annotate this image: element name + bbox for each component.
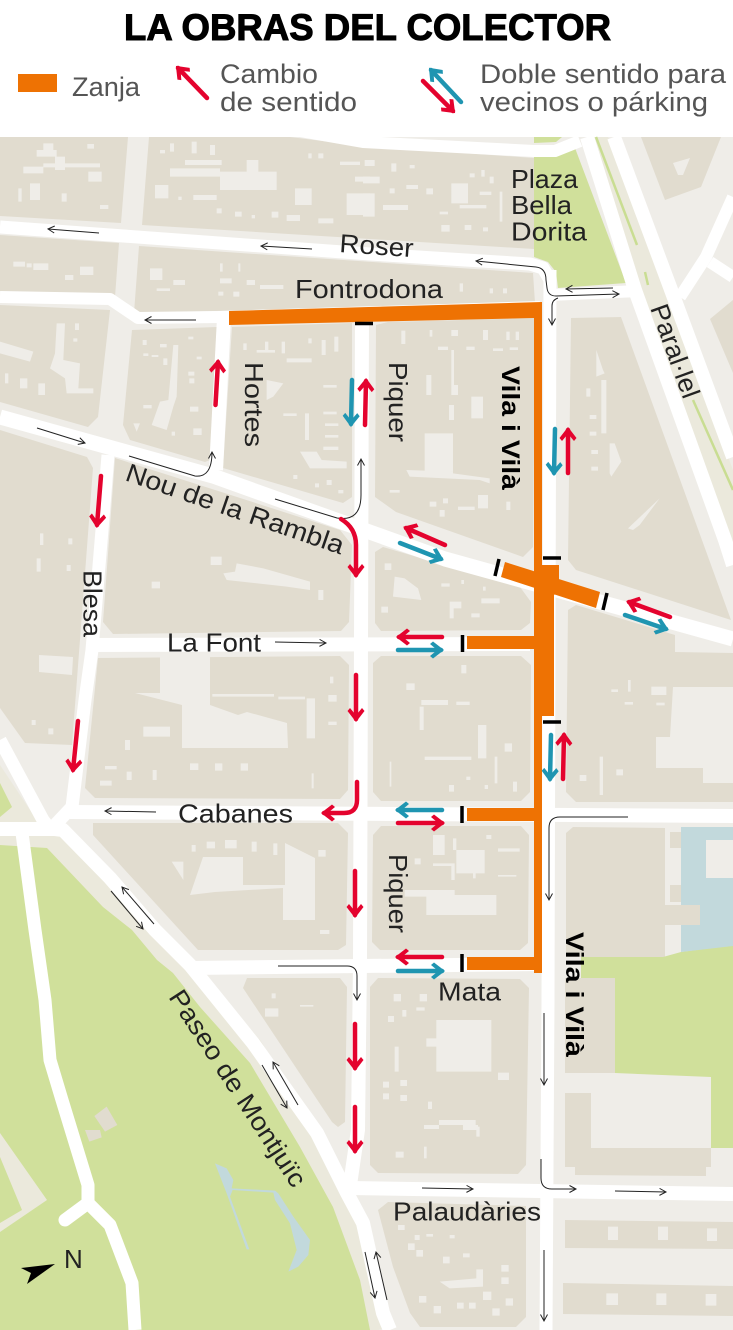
label: Plaza Bella Dorita: Bella <box>511 190 573 220</box>
two-way arrow pairs <box>351 380 670 971</box>
black closure bars <box>355 324 607 972</box>
pair: Piquer north <box>351 380 366 425</box>
legend: doble sentido: Doble sentido para <box>480 59 727 89</box>
legend: zanja <box>18 72 141 102</box>
legend: cambio de sentido <box>178 59 357 117</box>
street labels: Paral·lel <box>644 300 706 402</box>
street labels: La Font <box>167 628 262 658</box>
title: LA OBRAS DEL COLECTOR <box>124 7 611 48</box>
pair: Vila i Vilà north <box>554 429 568 473</box>
orange trench <box>229 302 600 973</box>
legend: cambio de sentido: Cambio <box>220 59 318 89</box>
street labels: Mata <box>438 976 502 1006</box>
pair: Cabanes <box>398 810 442 823</box>
street labels: Piquer <box>383 362 413 442</box>
street labels: Hortes <box>239 362 269 447</box>
pair: Nou de la Rambla west <box>400 528 445 559</box>
red direction-change arrows <box>73 362 357 1151</box>
street labels: Roser <box>339 228 415 263</box>
legend <box>18 59 727 117</box>
street labels: Palaudàries <box>393 1196 541 1226</box>
legend: doble sentido <box>423 59 727 117</box>
street labels: Nou de la Rambla <box>122 457 349 560</box>
legend: doble sentido: vecinos o párking <box>480 87 708 117</box>
median green stripe <box>596 137 733 490</box>
park building <box>85 1107 117 1142</box>
street labels: Fontrodona <box>295 274 444 304</box>
label: Plaza Bella Dorita: Dorita <box>511 216 588 246</box>
street labels <box>78 164 706 1226</box>
legend: zanja: Zanja <box>72 72 141 102</box>
thin traffic arrows <box>37 229 666 1321</box>
north arrow <box>21 1244 83 1284</box>
legend: cambio de sentido: de sentido <box>220 87 357 117</box>
water <box>215 827 733 1272</box>
pair: Vila i Vilà south <box>550 735 564 779</box>
street labels: Vila i Vilà <box>496 366 524 490</box>
label: Plaza Bella Dorita: Plaza <box>511 164 579 194</box>
pair: La Font <box>398 637 442 650</box>
label: Plaza Bella Dorita <box>511 164 588 246</box>
street labels: Blesa <box>78 570 108 638</box>
pair: Mata <box>398 957 442 971</box>
street labels: Vila i Vilà <box>560 932 588 1057</box>
north arrow: N <box>64 1244 83 1274</box>
street labels: Cabanes <box>178 798 293 828</box>
street labels: Piquer <box>383 854 413 933</box>
street labels: Paseo de Montjuïc <box>163 984 313 1192</box>
pair: Nou de la Rambla east <box>625 602 670 629</box>
